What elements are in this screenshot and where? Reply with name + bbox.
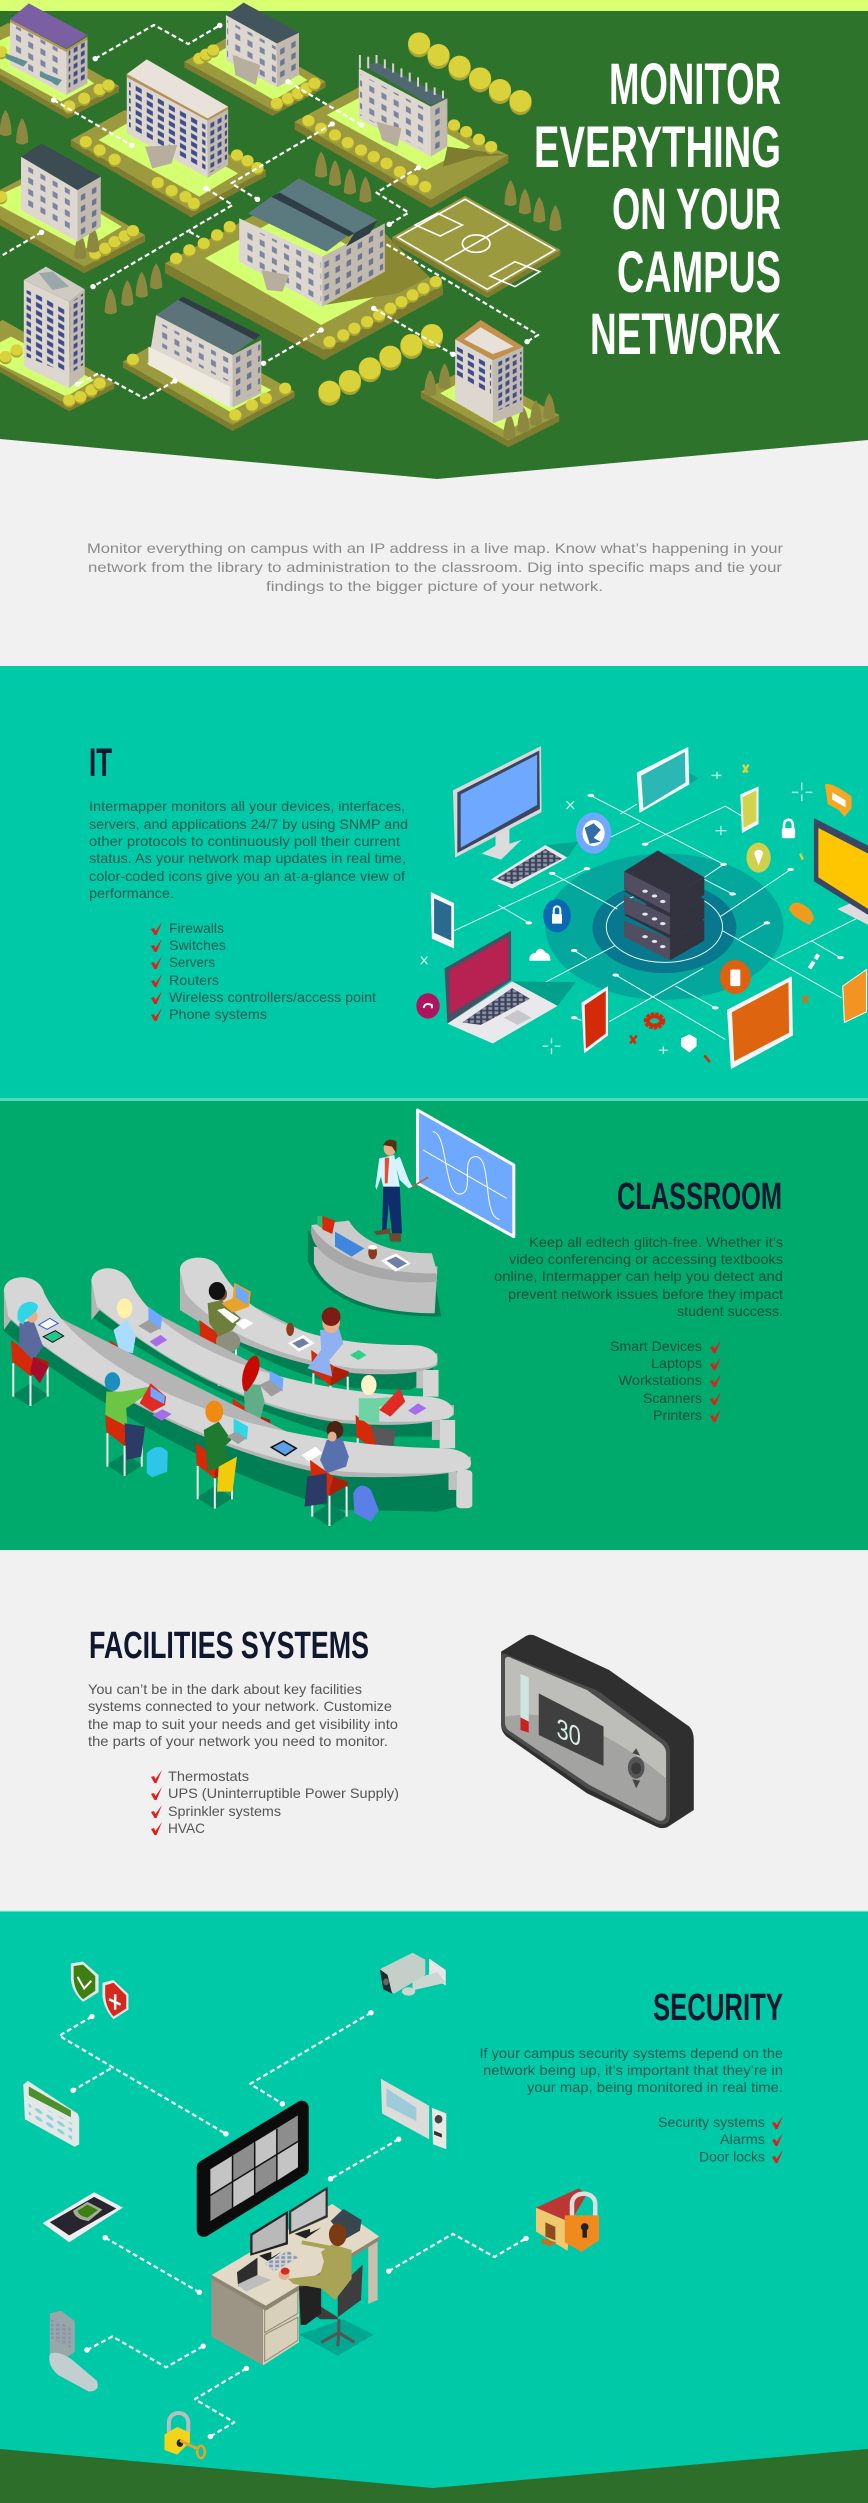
icon: tablet orange (727, 976, 793, 1069)
checklist: IT: Switches (169, 937, 226, 953)
illustration: thermostat (501, 1635, 694, 1828)
text: facilities description: the map to suit your needs and get visibility into (88, 1716, 398, 1732)
students front row (11, 1302, 379, 1527)
desk items (317, 1216, 411, 1272)
panel: facilities systems (0, 1550, 868, 1910)
text: classroom description: online, Intermapper can help you detect and (494, 1268, 783, 1284)
text: security description: network being up, it’s important that they’re in (483, 2062, 783, 2078)
checklist: classroom: Scanners (643, 1390, 702, 1406)
intro text: Monitor everything on campus with an IP address in a live map. Know what’s happening in your (87, 540, 783, 556)
icon: phone yellow (740, 786, 759, 833)
intro text (87, 540, 783, 594)
icon: video wall (204, 2108, 302, 2230)
icon: shield (681, 1034, 697, 1053)
monitors (237, 2187, 362, 2292)
desk row: middle (91, 1268, 455, 1448)
illustration: thermostat: 30 (556, 1713, 581, 1753)
icon: tablet teal (637, 747, 699, 813)
text: IT description: color-coded icons give you an at-a-glance view of (89, 868, 405, 884)
icon: padlock white (782, 820, 795, 838)
checklist: IT (151, 920, 376, 1022)
illustration: IT network (416, 746, 868, 1069)
illustration: isometric campus map (0, 3, 561, 447)
checklist: security: Alarms (720, 2131, 765, 2147)
icon: keyboard (491, 842, 579, 888)
checklist: facilities (151, 1768, 399, 1836)
checklist: IT: Routers (169, 972, 219, 988)
panel: security (0, 1910, 868, 2503)
text: IT description: Intermapper monitors all your devices, interfaces, (89, 798, 405, 814)
checklist: facilities: UPS (Uninterruptible Power Supply) (168, 1785, 399, 1801)
teacher desk (308, 1221, 441, 1317)
icon: phone red (581, 986, 608, 1053)
icon: globe badge (576, 813, 611, 854)
checklist: IT: Firewalls (169, 920, 224, 936)
text: facilities description: You can’t be in the dark about key facilities (88, 1681, 362, 1697)
checklist: classroom: Smart Devices (610, 1338, 702, 1354)
cone tree rows (0, 110, 561, 314)
footer band (0, 2449, 868, 2503)
icon: intercom (381, 2079, 446, 2149)
checklist: IT: Phone systems (169, 1006, 267, 1022)
intro text: findings to the bigger picture of your network. (266, 578, 603, 594)
heading: IT: IT (89, 741, 112, 785)
icon: smartphone shield (43, 2192, 123, 2242)
icon: laptop (445, 931, 576, 1043)
building: spired hall (295, 55, 508, 208)
text: IT description: other protocols to continuously poll their current (89, 833, 400, 849)
checklist: facilities: HVAC (168, 1820, 205, 1836)
teacher (374, 1140, 428, 1242)
building: left hall (0, 143, 145, 273)
checklist: facilities: Thermostats (168, 1768, 249, 1784)
server platform (545, 854, 783, 1000)
desk row: front (3, 1277, 472, 1512)
building: copper-trim tower (421, 320, 559, 447)
heading: facilities systems: FACILITIES SYSTEMS (89, 1625, 369, 1667)
text: classroom description: Keep all edtech glitch-free. Whether it’s (529, 1234, 783, 1250)
text: IT description (89, 798, 408, 901)
checklist: classroom: Laptops (651, 1355, 702, 1371)
students middle row (110, 1298, 426, 1482)
title: CAMPUS (617, 240, 781, 305)
building: tall tower left (0, 267, 115, 411)
checklist: IT: Wireless controllers/access point (169, 989, 376, 1005)
students back row (199, 1282, 367, 1417)
intro text: network from the library to administration to the classroom. Dig into specific maps and tie your (88, 559, 782, 575)
text: facilities description: systems connected to your network. Customize (88, 1698, 392, 1714)
heading: classroom: CLASSROOM (617, 1176, 782, 1218)
desk row: back (180, 1258, 439, 1397)
text: classroom description (494, 1234, 783, 1319)
whiteboard (417, 1110, 514, 1237)
heading: security: SECURITY (653, 1987, 783, 2029)
icon: gear (647, 1015, 662, 1026)
icon: location pin badge (746, 843, 771, 873)
checklist: security (658, 2114, 783, 2164)
checklist: classroom (610, 1338, 721, 1423)
icon: desktop monitor blue (453, 746, 542, 860)
illustration: security network (23, 1953, 599, 2458)
icon: phone badge orange (720, 960, 751, 994)
text: IT description: status. As your network map updates in real time, (89, 850, 406, 866)
icon: security camera (380, 1953, 446, 1996)
icon: call badge (416, 993, 440, 1019)
icon: house lock (536, 2188, 599, 2252)
server stack (624, 850, 704, 960)
icon: clouds (529, 903, 814, 961)
icon: shields (71, 1962, 128, 2019)
icon: mail bubble (825, 784, 852, 817)
title (534, 52, 781, 367)
network links (59, 2010, 529, 2439)
operator (279, 2223, 363, 2346)
panel: hero (0, 0, 868, 479)
icon: chain (810, 954, 818, 968)
checklist: security: Security systems (658, 2114, 765, 2130)
icon: padlock and key (164, 2413, 205, 2458)
panel: IT (0, 666, 868, 1101)
desk workstation (212, 2187, 379, 2365)
icon: lock badge (543, 899, 571, 932)
text: classroom description: prevent network issues before they impact (508, 1286, 783, 1302)
icon: alarm keypad (23, 2081, 79, 2147)
hedge rows (318, 32, 532, 406)
sports field (392, 196, 560, 298)
building: arcade hall (123, 297, 295, 431)
text: classroom description: student success. (677, 1303, 783, 1319)
building: dark roof top (184, 3, 326, 116)
checklist: classroom: Workstations (618, 1372, 702, 1388)
panel: classroom (0, 1101, 868, 1550)
icon: yellow monitor (814, 818, 868, 925)
checklist: IT: Servers (169, 954, 215, 970)
text: security description (480, 2045, 783, 2095)
text: classroom description: video conferencing or accessing textbooks (509, 1251, 783, 1267)
checklist: security: Door locks (699, 2148, 765, 2164)
text: IT description: servers, and applications 24/7 by using SNMP and (89, 816, 408, 832)
text: IT description: performance. (89, 885, 174, 901)
building: main hall (165, 178, 443, 360)
illustration: lecture hall (3, 1110, 514, 1527)
icon: tablet right (843, 970, 867, 1022)
text: security description: If your campus security systems depend on the (480, 2045, 783, 2061)
checklist: facilities: Sprinkler systems (168, 1803, 281, 1819)
building: purple roof (0, 3, 119, 119)
circuit lines (454, 794, 864, 1039)
building: tall white block (71, 59, 266, 217)
sparkles (421, 765, 812, 1062)
text: security description: your map, being monitored in real time. (527, 2079, 783, 2095)
checklist: classroom: Printers (653, 1407, 702, 1423)
network links (0, 23, 538, 398)
icon: door lock (49, 2311, 98, 2392)
text: facilities description: the parts of your network you need to monitor. (88, 1733, 388, 1749)
text: facilities description (88, 1681, 398, 1749)
icon: phone blue (431, 892, 454, 949)
